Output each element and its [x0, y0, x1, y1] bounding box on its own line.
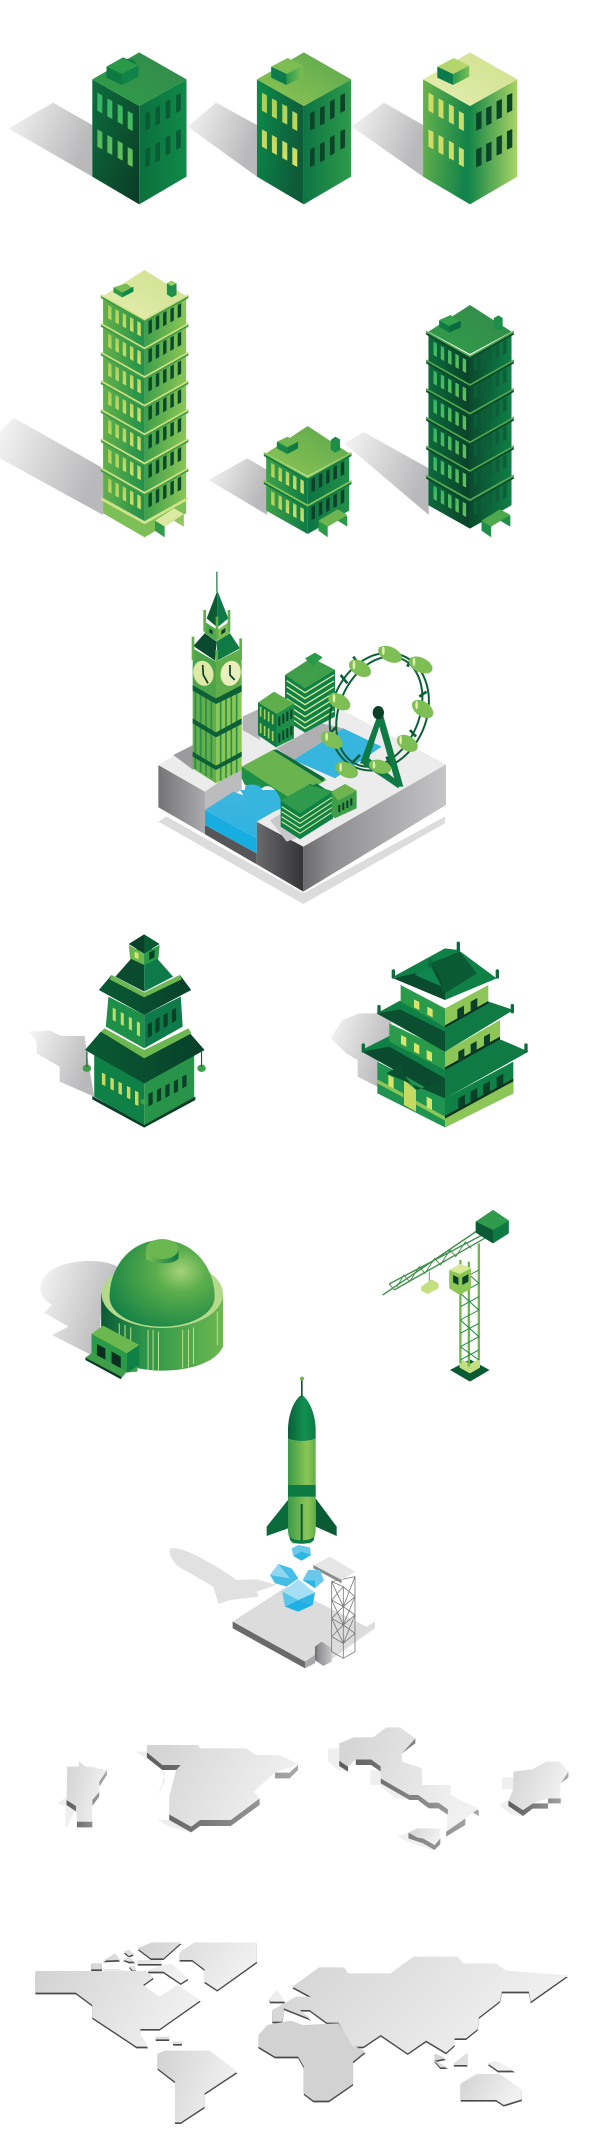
building: dark green: [92, 52, 187, 204]
world map: [35, 1942, 568, 2124]
launch pad: [233, 1587, 375, 1668]
extrusion: [35, 1944, 568, 2124]
bridge: [242, 749, 327, 808]
shadow: dark building: [8, 103, 92, 177]
dome building: [85, 1239, 223, 1379]
middle floor: [389, 1020, 500, 1070]
middle roof: [377, 1001, 513, 1052]
Big Ben: [191, 572, 243, 783]
map: Italy: [328, 1727, 479, 1851]
shadow: left pagoda: [29, 1031, 94, 1097]
pagoda: left: [83, 934, 206, 1128]
shadow: light building: [352, 103, 423, 177]
top roof: [393, 948, 497, 1000]
launch tower: [313, 1557, 355, 1658]
row of three office buildings: [8, 52, 517, 204]
land surfaces: [35, 1942, 568, 2122]
building: medium green: [257, 52, 351, 204]
lower roof: [362, 1036, 528, 1098]
tower: dark: [426, 305, 514, 537]
tower crane: [383, 1210, 509, 1382]
pagoda: right: [362, 942, 528, 1127]
blue crystals: [270, 1545, 324, 1612]
rocket shadow: [170, 1548, 277, 1604]
river: [205, 728, 382, 853]
dome and crane: [40, 1210, 509, 1382]
small office block: [258, 692, 294, 747]
Hudson Bay cut-out: [145, 1982, 175, 1997]
map: Portugal: [57, 1761, 107, 1827]
tower: short: [264, 426, 352, 537]
shadow: right pagoda: [331, 1013, 392, 1088]
London Eye: [312, 637, 447, 788]
shadow: short tower: [208, 458, 267, 515]
row of three towers: [0, 270, 514, 537]
back office block: [285, 653, 335, 733]
shadow: dark tower: [344, 432, 429, 515]
shadow: tall tower: [0, 418, 103, 515]
block ground shadow: [158, 817, 445, 904]
map: Spain: [135, 1745, 298, 1833]
rocket launch: [170, 1377, 375, 1668]
shadow: dome: [40, 1261, 117, 1358]
roof finials: [362, 942, 528, 1053]
country maps: [57, 1727, 568, 1851]
ground floor: [377, 1062, 513, 1127]
rocket: [267, 1377, 337, 1544]
shadow: mid building: [188, 103, 257, 177]
map: Greece: [499, 1762, 568, 1816]
top floor: [401, 985, 488, 1028]
London diorama: [158, 572, 447, 904]
building: light green: [423, 52, 517, 204]
left pagoda with shadow: [29, 934, 392, 1128]
front office block: [281, 784, 357, 839]
tower: tall light: [101, 270, 188, 537]
grey block: [158, 693, 446, 892]
